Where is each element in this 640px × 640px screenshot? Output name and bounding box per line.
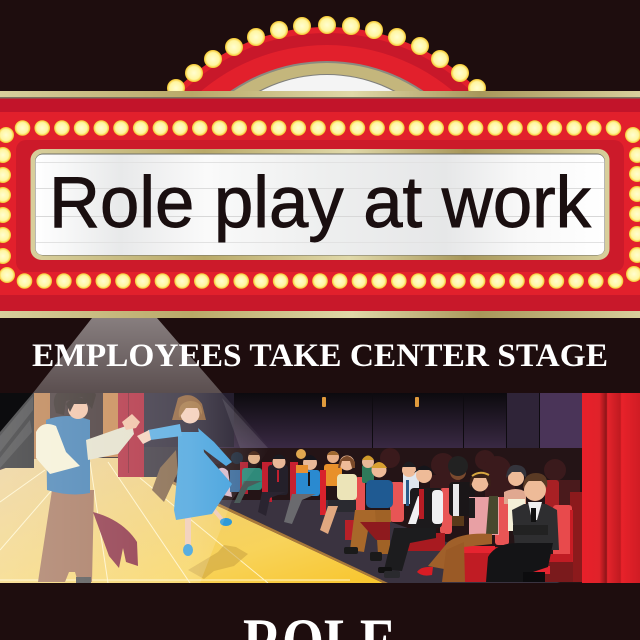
- spotlight in scene: [0, 393, 270, 583]
- title: Role play at work: [49, 162, 592, 243]
- auditorium floor: [204, 448, 582, 455]
- bottom bulb row: [17, 273, 623, 289]
- audience: afro man: [448, 456, 475, 526]
- audience: woman with grey hair: [504, 465, 559, 531]
- back-row silhouettes: [380, 448, 582, 582]
- actor: woman: [137, 395, 232, 556]
- right curtain: [582, 393, 640, 583]
- floor boards: [0, 462, 350, 583]
- top bulb row: [15, 120, 621, 136]
- marquee board: [0, 91, 640, 318]
- audience: orange and cream women: [320, 451, 365, 540]
- wall sconces: [322, 397, 419, 407]
- stage scene: [0, 384, 640, 583]
- audience: woman in pink and green: [417, 472, 509, 582]
- floor shadow: [188, 545, 248, 579]
- audience: blond man in blue: [344, 456, 404, 561]
- side bulbs: [0, 127, 640, 283]
- spotlight beam: [33, 318, 222, 393]
- marquee arch: [167, 16, 486, 91]
- subtitle: EMPLOYEES TAKE CENTER STAGE: [32, 338, 608, 374]
- spotlight rays: [0, 396, 268, 468]
- audience: small rows at left: [211, 449, 320, 524]
- audience: man with red tie: [378, 462, 452, 578]
- stage floor: [0, 458, 383, 583]
- back wall: [218, 393, 506, 448]
- actor: man: [36, 384, 140, 583]
- sign panel: [36, 154, 604, 255]
- backstage curtains: [0, 393, 234, 477]
- sign frame: [30, 149, 610, 260]
- audience: man with vest: [486, 473, 573, 582]
- arch bulbs: [167, 16, 486, 97]
